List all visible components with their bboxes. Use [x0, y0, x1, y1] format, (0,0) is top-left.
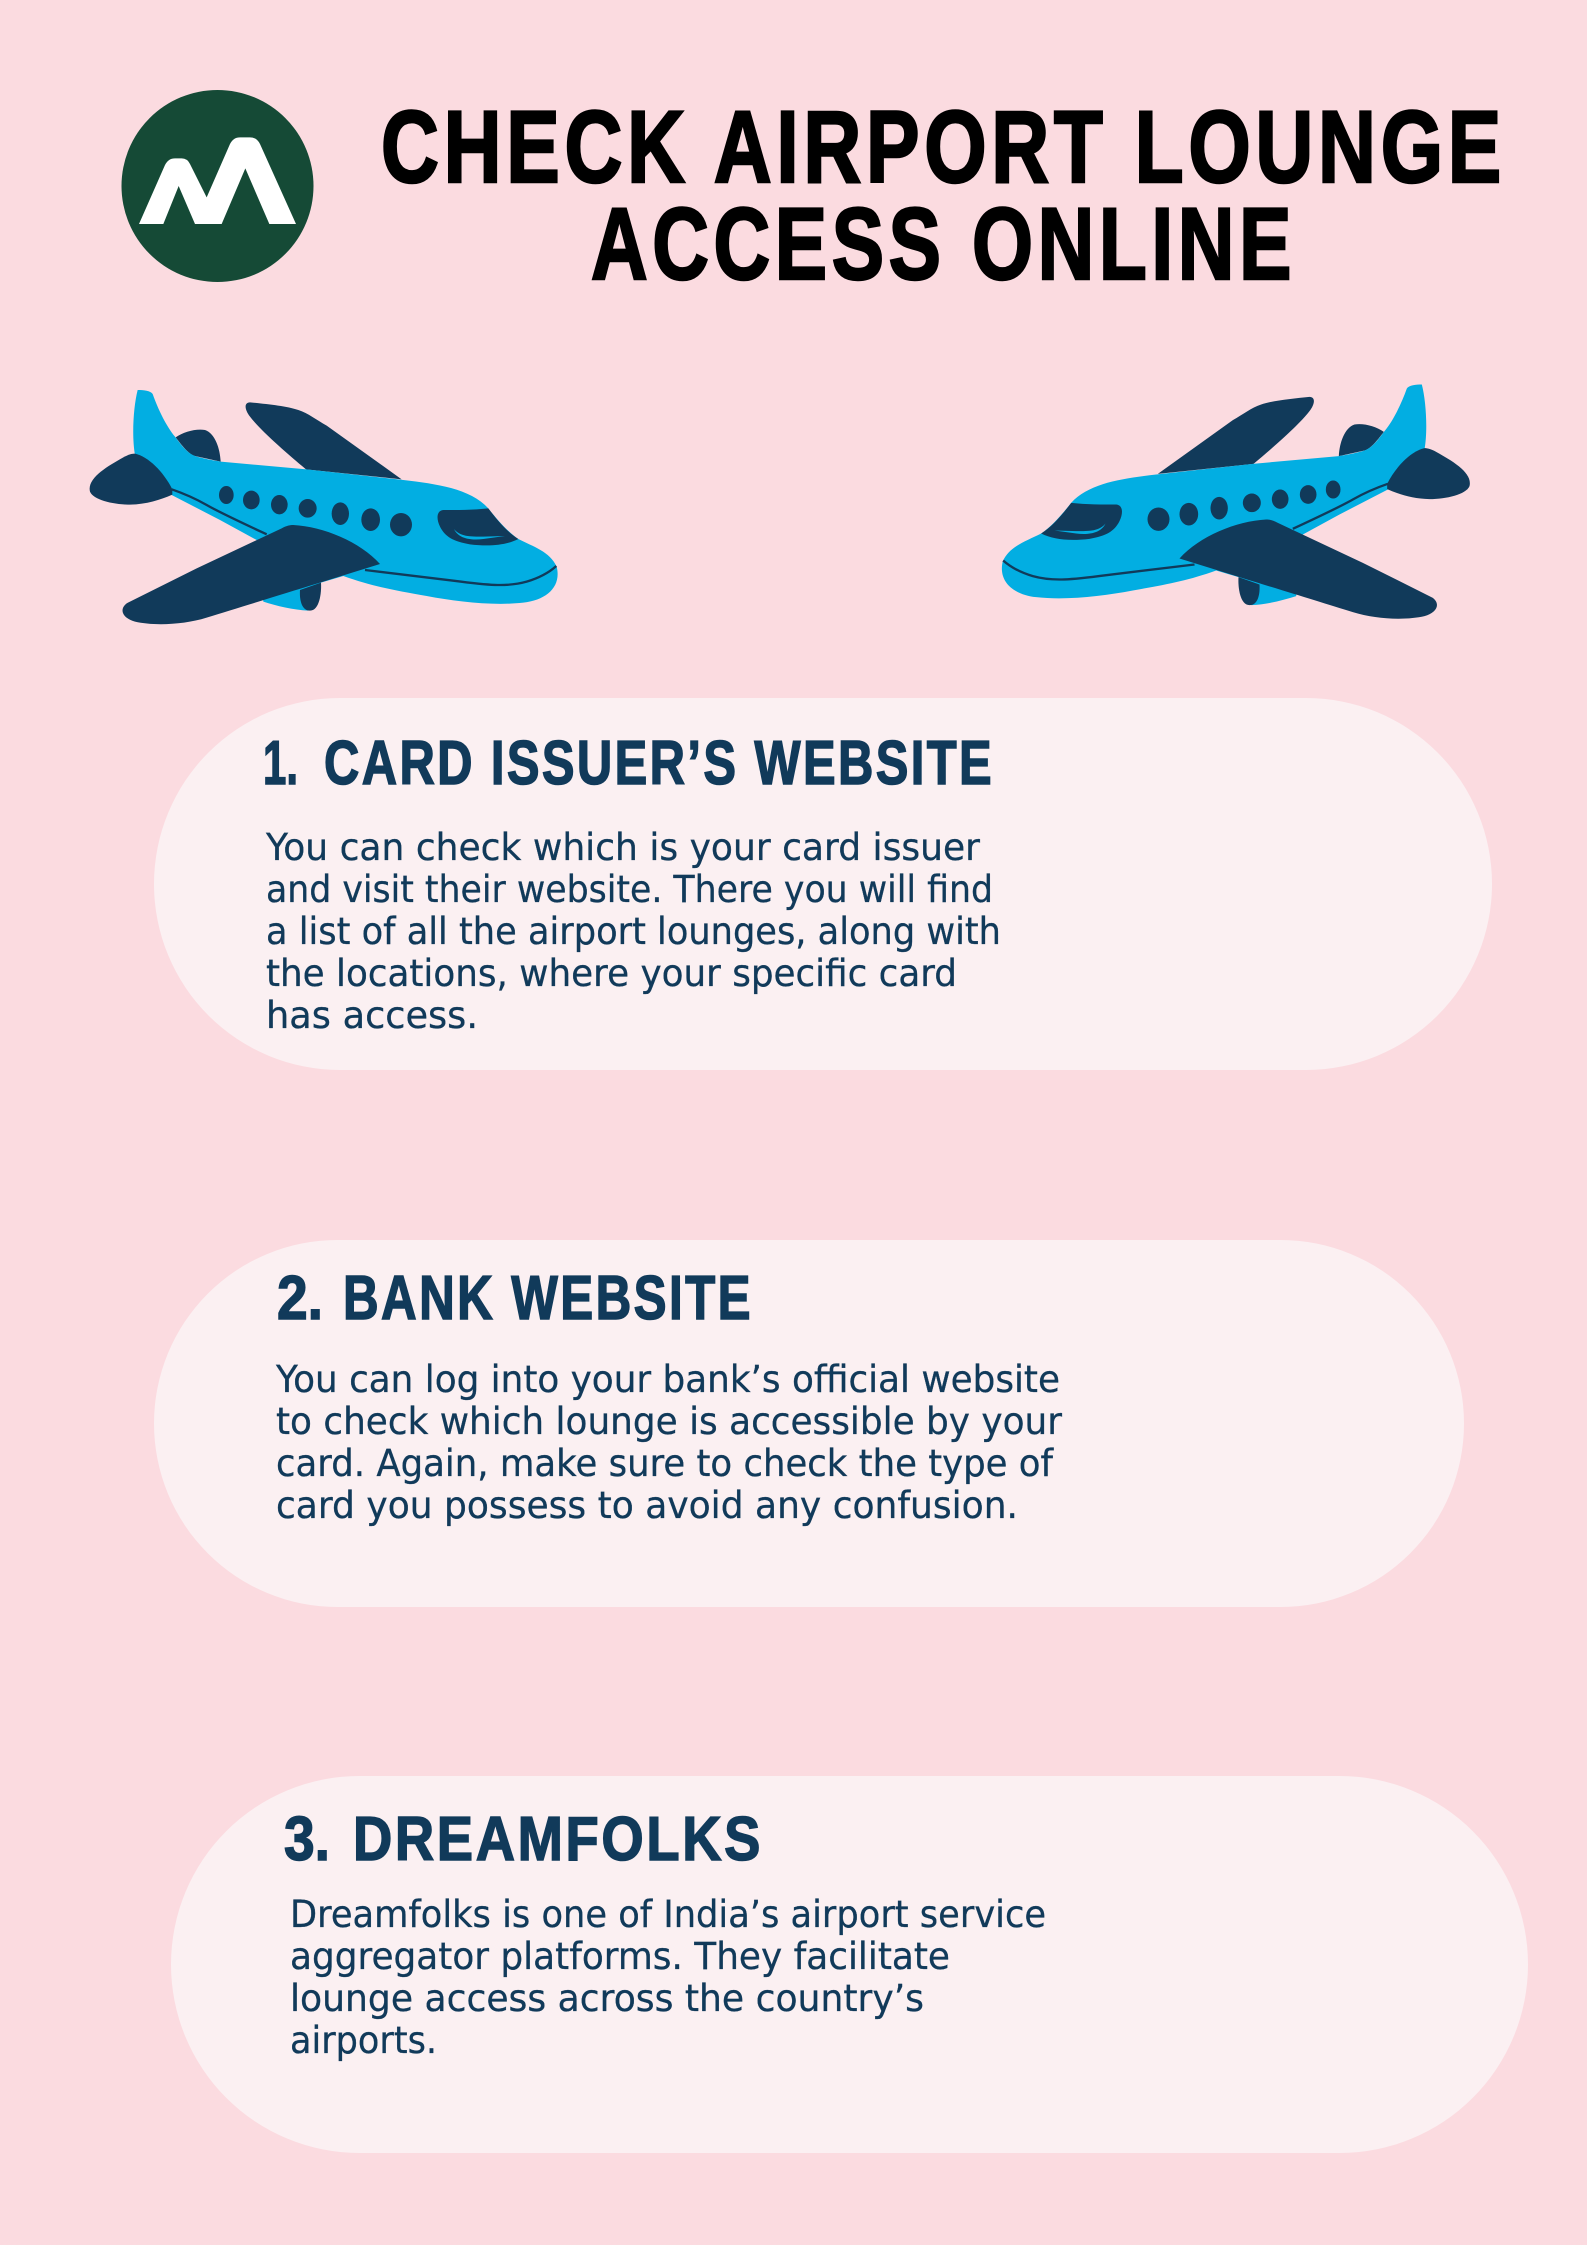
heading: step 2: BANK WEBSITE: [343, 1264, 753, 1333]
text block: step 2 description: You can log into your bank’s official website: [275, 1358, 1060, 1401]
title: [381, 90, 1506, 301]
icon: right airplane: [1002, 384, 1470, 619]
text block: step 1 description: [265, 826, 1001, 1037]
heading: step 1: 1.: [263, 729, 298, 798]
text block: step 2 description: card you possess to avoid any confusion.: [276, 1484, 1018, 1527]
text block: step 1 description: You can check which is your card issuer: [265, 826, 981, 869]
text block: step 3 description: aggregator platforms. They facilitate: [290, 1935, 950, 1978]
panel: bank website: [154, 1240, 1464, 1607]
logo: green circle with M: [122, 90, 314, 282]
title: ACCESS ONLINE: [591, 187, 1296, 301]
text block: step 1 description: a list of all the airport lounges, along with: [266, 910, 1001, 953]
icon: left airplane: [90, 390, 558, 624]
text block: step 1 description: the locations, where your specific card: [266, 952, 957, 995]
text block: step 3 description: Dreamfolks is one of India’s airport service: [290, 1893, 1046, 1936]
panel: dreamfolks: [171, 1776, 1528, 2153]
text block: step 3 description: airports.: [290, 2019, 437, 2062]
heading: step 3: 3.: [284, 1805, 330, 1874]
text block: step 1 description: has access.: [266, 994, 478, 1037]
text block: step 2 description: [275, 1358, 1063, 1527]
heading: step 3: DREAMFOLKS: [353, 1805, 763, 1874]
heading: step 2: 2.: [277, 1264, 323, 1333]
heading: step 1: CARD ISSUER’S WEBSITE: [324, 729, 994, 798]
text block: step 2 description: to check which lounge is accessible by your: [276, 1400, 1063, 1443]
text block: step 3 description: [290, 1893, 1046, 2062]
text block: step 2 description: card. Again, make sure to check the type of: [276, 1442, 1054, 1485]
panel: card issuer's website: [154, 698, 1492, 1070]
text block: step 3 description: lounge access across the country’s: [290, 1977, 924, 2020]
text block: step 1 description: and visit their website. There you will find: [266, 868, 993, 911]
